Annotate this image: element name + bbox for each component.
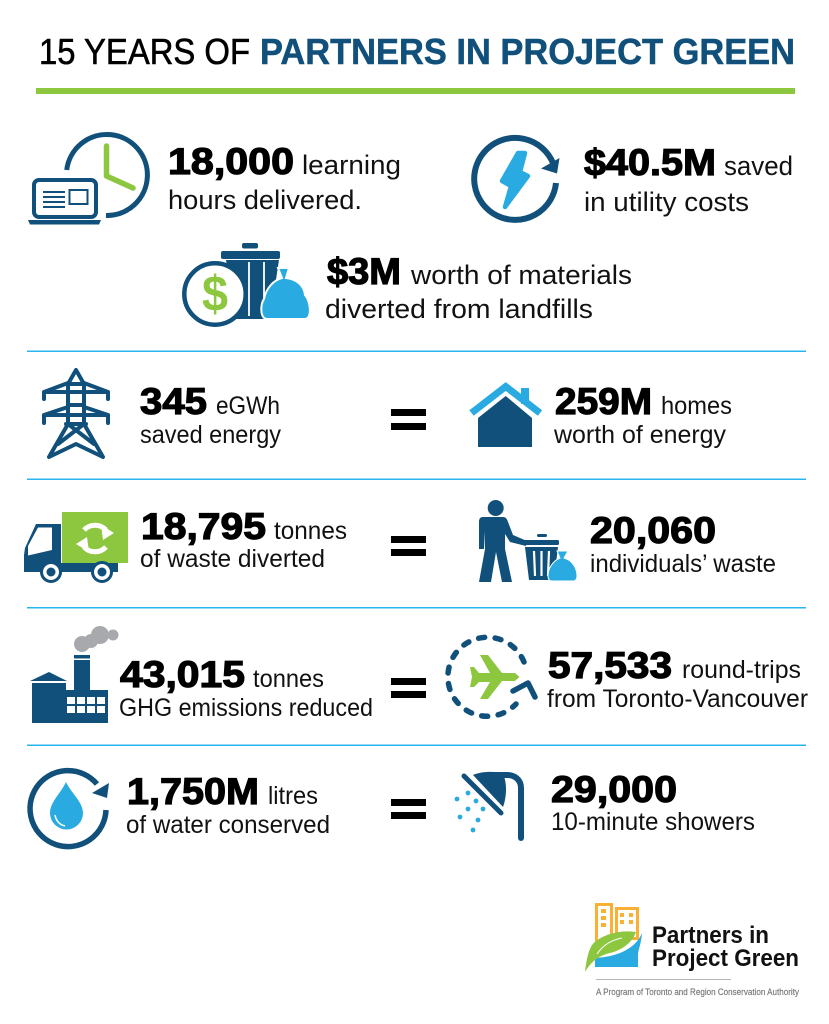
- text: 345 eGWh saved energy: saved energy: [140, 421, 281, 449]
- text: 18,795 tonnes of waste diverted: tonnes: [274, 517, 347, 545]
- text: 18,795 tonnes of waste diverted: of waste diverted: [140, 545, 325, 573]
- text: 43,015 tonnes GHG emissions reduced: 43,015: [120, 654, 245, 695]
- text: 20,060 individuals' waste: 20,060: [590, 510, 716, 551]
- text: $3M worth of materials diverted from landfills: worth of materials: [410, 260, 632, 290]
- text: 57,533 round-trips from Toronto-Vancouver: round-trips: [682, 656, 801, 684]
- row: emissions: [30, 626, 808, 723]
- icon: recycling truck: [24, 512, 128, 582]
- text: 57,533 round-trips from Toronto-Vancouver: [547, 645, 808, 713]
- icon: water drop in circular arrow: [30, 771, 109, 847]
- stat: individuals' waste: [479, 500, 776, 582]
- text: 57,533 round-trips from Toronto-Vancouver: 57,533: [548, 645, 672, 686]
- icon: shower head: [455, 772, 521, 838]
- equals sign: [391, 409, 426, 430]
- icon: coin, bin and bag: [184, 243, 310, 325]
- text: $40.5M saved in utility costs: saved: [724, 151, 793, 181]
- equals sign: [391, 799, 426, 819]
- text: 18,000 learning hours delivered: [168, 141, 401, 215]
- text: 259M homes worth of energy: [553, 381, 732, 449]
- logo wordmark: [652, 922, 799, 972]
- stat: water conserved: [30, 771, 330, 847]
- text: 1,750M litres of water conserved: 1,750M: [127, 771, 259, 812]
- text: 43,015 tonnes GHG emissions reduced: GHG emissions reduced: [119, 694, 373, 722]
- text: 345 eGWh saved energy: eGWh: [216, 392, 280, 420]
- text: 57,533 round-trips from Toronto-Vancouver: from Toronto-Vancouver: [547, 685, 808, 713]
- text: 1,750M litres of water conserved: [126, 771, 330, 839]
- text: 29,000 10-minute showers: 29,000: [551, 769, 677, 810]
- text: 20,060 individuals' waste: individuals’ waste: [590, 550, 776, 578]
- text: $3M worth of materials diverted from landfills: $3M: [327, 251, 401, 292]
- text: 18,000 learning hours delivered: learning: [302, 150, 401, 180]
- logo mark: buildings and leaf: [585, 904, 642, 972]
- title: 15 YEARS OF: [39, 31, 250, 72]
- row: energy: [44, 370, 732, 457]
- icon: person with bin and bag: [479, 500, 577, 582]
- text: 1,750M litres of water conserved: of water conserved: [126, 811, 330, 839]
- icon: laptop and clock: [28, 135, 147, 224]
- text: $40.5M saved in utility costs: $40.5M: [584, 142, 716, 183]
- stat: learning hours: [28, 135, 401, 224]
- logo: Partners in Project Green: [585, 904, 799, 997]
- stat: utility costs: [474, 138, 793, 220]
- text: 18,000 learning hours delivered: 18,000: [168, 141, 294, 182]
- text: 43,015 tonnes GHG emissions reduced: [119, 654, 373, 722]
- stat: waste diverted: [24, 506, 347, 582]
- text: $40.5M saved in utility costs: [584, 142, 793, 217]
- stat: GHG emissions: [30, 626, 373, 723]
- icon: coin, bin and bag: $: [202, 266, 228, 322]
- stat: homes: [472, 381, 732, 449]
- stat: showers: [455, 769, 755, 838]
- icon: airplane in dashed circle: [448, 637, 535, 716]
- text: 259M homes worth of energy: homes: [661, 392, 732, 420]
- text: $3M worth of materials diverted from landfills: [325, 251, 632, 324]
- text: 29,000 10-minute showers: 10-minute showers: [551, 808, 755, 836]
- row: water: [30, 769, 755, 847]
- icon: house: [472, 386, 540, 447]
- text: 18,795 tonnes of waste diverted: [140, 506, 347, 573]
- logo wordmark: Partners in: [652, 922, 769, 949]
- stat: saved energy: [44, 370, 281, 457]
- logo tagline: A Program of Toronto and Region Conservation Authority: [596, 987, 799, 997]
- text: 43,015 tonnes GHG emissions reduced: tonnes: [253, 665, 324, 693]
- text: 259M homes worth of energy: 259M: [555, 381, 652, 422]
- title: [39, 31, 795, 72]
- text: 20,060 individuals' waste: [590, 510, 776, 578]
- title: PARTNERS IN PROJECT GREEN: [260, 31, 795, 72]
- icon: transmission tower: [44, 370, 108, 457]
- text: 259M homes worth of energy: worth of energy: [553, 421, 726, 449]
- text: 18,795 tonnes of waste diverted: 18,795: [141, 506, 266, 547]
- text: $40.5M saved in utility costs: in utility costs: [584, 187, 749, 217]
- row: waste: [24, 500, 776, 582]
- text: 345 eGWh saved energy: [140, 381, 281, 449]
- text: 345 eGWh saved energy: 345: [140, 381, 207, 422]
- text: 29,000 10-minute showers: [551, 769, 755, 836]
- equals sign: [391, 678, 426, 698]
- text: 1,750M litres of water conserved: litres: [268, 782, 318, 810]
- stat: round-trips: [448, 637, 808, 716]
- equals sign: [391, 536, 426, 556]
- icon: lightning bolt in circular arrow: [474, 138, 560, 220]
- text: 18,000 learning hours delivered: hours delivered.: [168, 185, 362, 215]
- icon: factory with smoke: [30, 626, 118, 723]
- logo wordmark: Project Green: [652, 945, 799, 972]
- stat: materials diverted: [184, 243, 632, 325]
- text: $3M worth of materials diverted from landfills: diverted from landfills: [325, 294, 593, 324]
